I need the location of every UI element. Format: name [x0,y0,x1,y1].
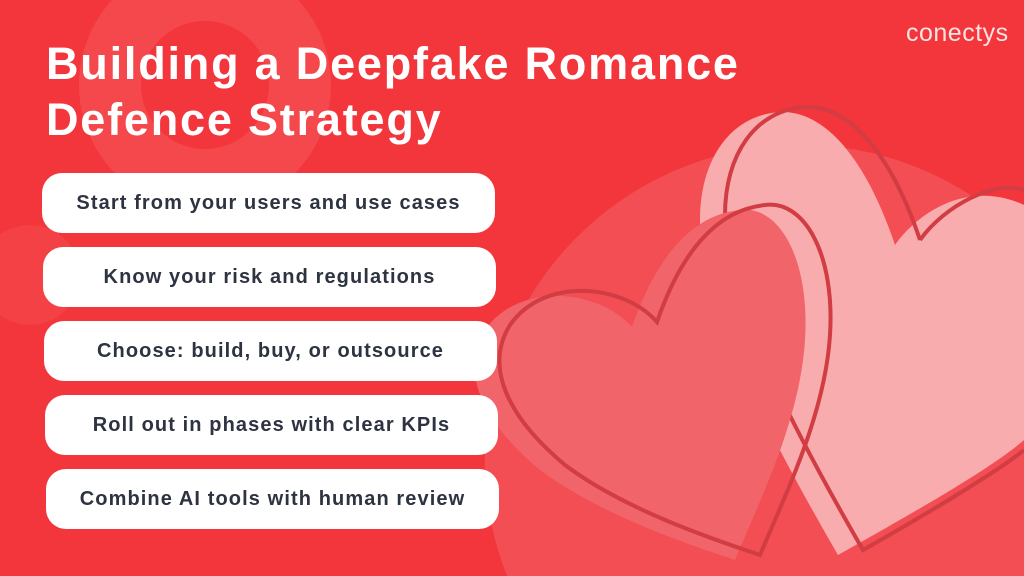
back heart [700,107,1024,555]
pill 2 [43,247,496,307]
pill 2: Know your risk and regulations [104,266,435,288]
title [46,38,740,145]
pill 5 [46,469,499,529]
pill 5: Combine AI tools with human review [80,488,465,510]
pill 3: Choose: build, buy, or outsource [97,340,444,362]
pill 3 [44,321,497,381]
title: Defence Strategy [46,94,442,145]
pill 4 [45,395,498,455]
pill 4: Roll out in phases with clear KPIs [93,414,450,436]
logo: conectys [906,19,1009,47]
front heart [474,205,831,560]
pill 1: Start from your users and use cases [76,192,461,214]
pill 1 [42,173,495,233]
title: Building a Deepfake Romance [46,38,740,89]
